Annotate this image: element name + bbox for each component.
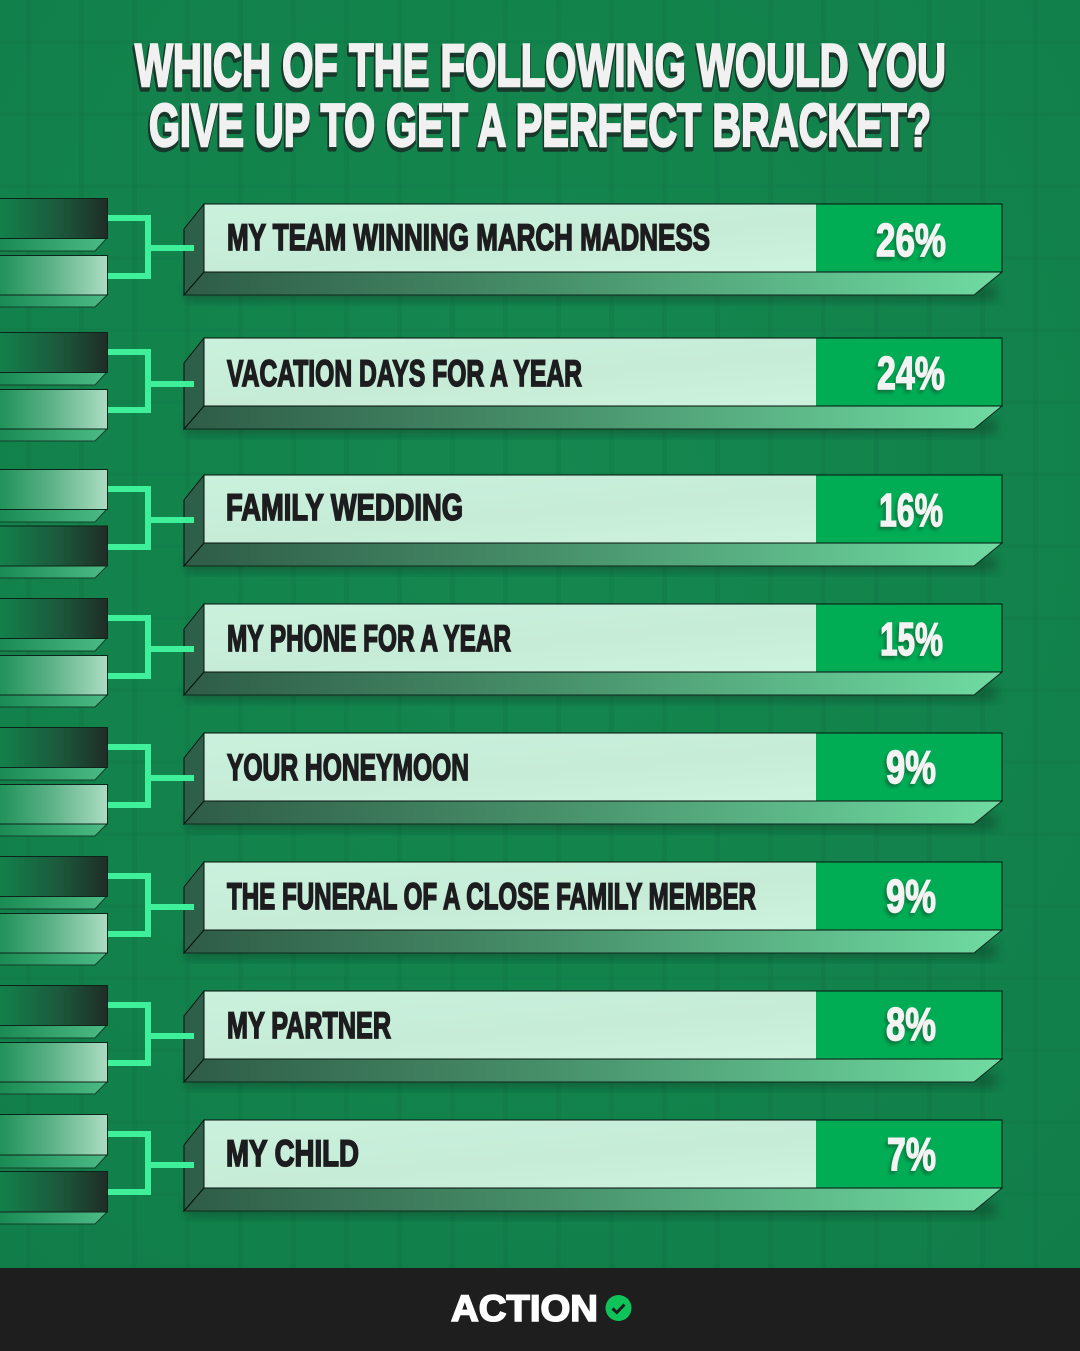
row 4: my phone for a year 15%	[0, 598, 1002, 707]
row 1: my team winning march madness 26%	[0, 198, 1002, 307]
bracket connector	[108, 352, 194, 410]
label: YOUR HONEYMOON	[227, 747, 469, 788]
bracket seeds	[0, 598, 108, 707]
value: 8%	[886, 998, 936, 1050]
value: 9%	[886, 870, 936, 922]
row 5: your honeymoon 9%	[0, 728, 1002, 836]
bracket seeds	[0, 728, 108, 836]
row 6: the funeral of a close family member 9%	[0, 856, 1002, 965]
value: 15%	[880, 613, 943, 665]
bracket seeds	[0, 1114, 108, 1224]
bar	[184, 733, 1002, 824]
label: MY TEAM WINNING MARCH MADNESS	[227, 217, 710, 258]
title	[134, 32, 946, 162]
bracket seeds	[0, 332, 108, 441]
row 3: family wedding 16%	[0, 470, 1002, 578]
label: THE FUNERAL OF A CLOSE FAMILY MEMBER	[227, 876, 756, 917]
label: VACATION DAYS FOR A YEAR	[227, 353, 582, 394]
bracket connector	[108, 218, 194, 276]
bracket connector	[108, 618, 194, 676]
bracket connector	[108, 876, 194, 934]
bar	[184, 604, 1002, 695]
bracket seeds	[0, 198, 108, 307]
row 7: my partner 8%	[0, 986, 1002, 1094]
bracket seeds	[0, 986, 108, 1094]
bracket seeds	[0, 856, 108, 965]
icon: check badge	[606, 1295, 632, 1321]
bar	[184, 991, 1002, 1082]
bar	[184, 1120, 1002, 1211]
label: FAMILY WEDDING	[226, 487, 463, 528]
bracket connector	[108, 1134, 194, 1192]
bracket seeds	[0, 470, 108, 578]
label: MY PHONE FOR A YEAR	[227, 618, 511, 659]
bracket connector	[108, 747, 194, 805]
value: 9%	[886, 741, 936, 793]
bar	[184, 862, 1002, 953]
bar	[184, 338, 1002, 429]
value: 16%	[879, 484, 943, 536]
label: MY CHILD	[226, 1133, 359, 1174]
bracket connector	[108, 489, 194, 547]
value: 24%	[877, 347, 945, 399]
bar	[184, 204, 1002, 295]
row 8: my child 7%	[0, 1114, 1002, 1224]
label: MY PARTNER	[227, 1005, 391, 1046]
value: 26%	[876, 214, 946, 266]
footer logo: ACTION	[451, 1288, 598, 1329]
bar	[184, 475, 1002, 566]
row 2: vacation days for a year 24%	[0, 332, 1002, 441]
bracket connector	[108, 1005, 194, 1063]
value: 7%	[887, 1128, 936, 1180]
footer bar	[0, 1268, 1080, 1351]
